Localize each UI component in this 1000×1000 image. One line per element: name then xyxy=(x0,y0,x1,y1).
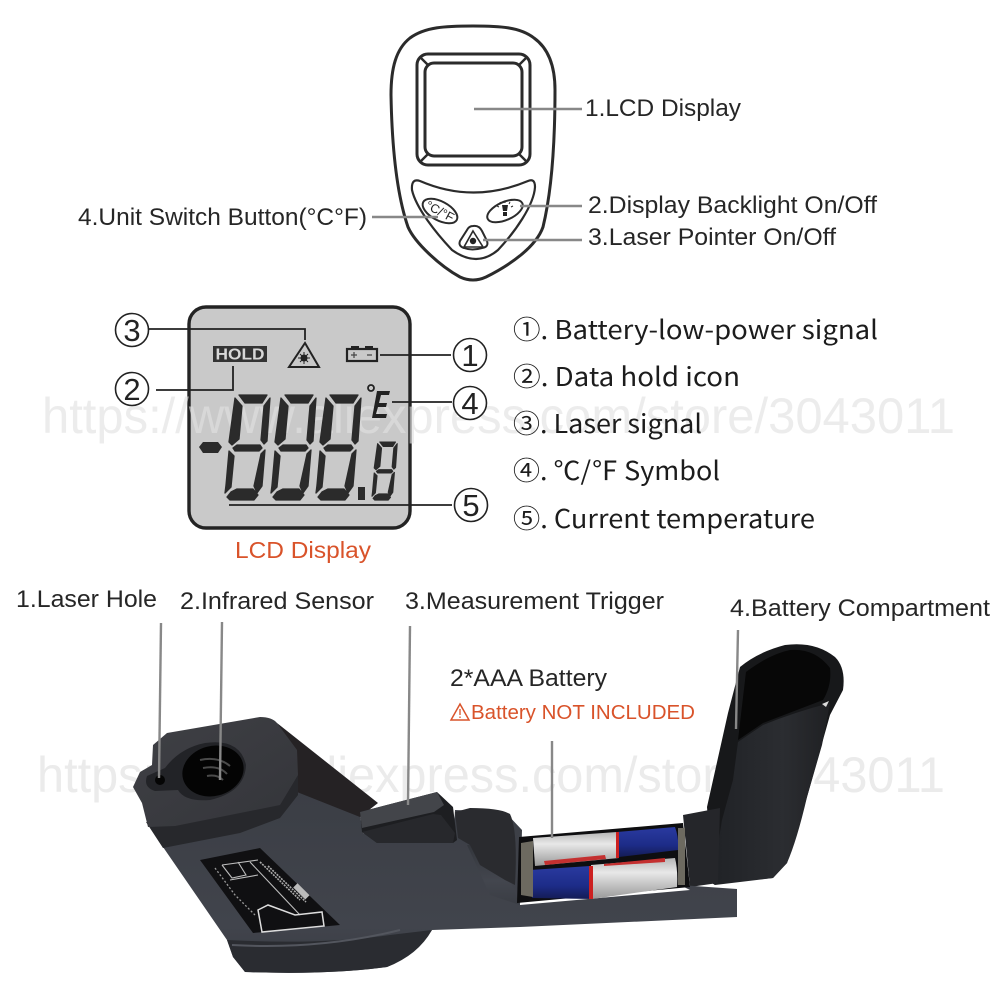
LCD indicators and digits xyxy=(199,343,397,500)
seven segment digit xyxy=(225,395,270,500)
legend list xyxy=(513,310,878,536)
device body outline xyxy=(391,26,555,280)
collar xyxy=(455,808,516,885)
seven segment digit xyxy=(316,395,361,500)
leader lines for device diagram xyxy=(372,109,582,240)
grip highlight xyxy=(232,930,400,946)
HOLD icon: HOLD xyxy=(216,346,264,364)
LCD caption: LCD Display xyxy=(235,537,372,563)
neck xyxy=(467,845,520,905)
watermark lower: https://www.aliexpress.com/store/3043011 xyxy=(37,747,945,803)
warning: battery not included: Battery NOT INCLUDED xyxy=(471,702,695,724)
unit switch button: °C/°F xyxy=(423,198,457,225)
callout 4 xyxy=(454,386,486,421)
legend item 5: ⑤. Current temperature xyxy=(513,499,815,536)
label: AAA battery: 2*AAA Battery xyxy=(450,665,607,692)
label: LCD display: 1.LCD Display xyxy=(585,95,741,122)
seven segment digit xyxy=(271,395,316,500)
head front face xyxy=(133,717,298,827)
battery cover xyxy=(683,644,844,887)
label: laser pointer: 3.Laser Pointer On/Off xyxy=(588,224,836,251)
sensor hole xyxy=(146,739,249,803)
battery bottom xyxy=(530,858,677,899)
unit switch button xyxy=(419,194,461,228)
head rim xyxy=(146,772,298,848)
battery bay xyxy=(517,823,690,903)
laser button xyxy=(460,226,487,250)
label: laser hole: 1.Laser Hole xyxy=(16,586,157,613)
LCD callout leaders xyxy=(148,329,452,505)
callout 3 xyxy=(116,313,148,348)
legend item 3: ③. Laser signal xyxy=(513,404,702,441)
callout 2 xyxy=(116,372,148,407)
bottom photo leaders xyxy=(159,622,738,838)
callout 3: 3 xyxy=(123,313,141,348)
callout 1: 1 xyxy=(461,338,479,373)
label: infrared sensor: 2.Infrared Sensor xyxy=(180,588,374,615)
callout 5: 5 xyxy=(462,488,480,523)
label: backlight: 2.Display Backlight On/Off xyxy=(588,192,877,219)
decimal point xyxy=(358,487,365,500)
legend item 1: ①. Battery-low-power signal xyxy=(513,310,878,347)
legend item 4: ④. ℃/℉ Symbol xyxy=(513,451,720,488)
battery top xyxy=(533,827,678,866)
thermometer photo xyxy=(133,644,844,973)
degree F symbol xyxy=(368,385,390,418)
laser icon xyxy=(289,343,319,367)
callout 5 xyxy=(454,488,488,523)
button panel xyxy=(412,180,535,259)
device front outline diagram xyxy=(391,26,555,280)
battery icon xyxy=(347,346,377,361)
sticker xyxy=(200,848,340,933)
battery springs xyxy=(521,828,685,897)
small seven segment digit xyxy=(372,442,397,500)
grip bottom edge xyxy=(227,930,432,973)
label: battery compartment: 4.Battery Compartment xyxy=(730,595,990,622)
grip body xyxy=(150,790,737,973)
trigger xyxy=(360,792,457,843)
callout 1 xyxy=(454,338,486,373)
minus segment xyxy=(199,442,222,453)
LCD window frame xyxy=(417,54,530,165)
panel: LCD screen xyxy=(189,307,410,528)
label: unit switch: 4.Unit Switch Button(°C°F) xyxy=(78,204,367,231)
backlight button xyxy=(484,195,526,227)
label: measurement trigger: 3.Measurement Trigger xyxy=(405,588,664,615)
watermark upper: https://www.aliexpress.com/store/3043011 xyxy=(42,388,955,444)
legend item 2: ②. Data hold icon xyxy=(513,357,740,394)
callout 4: 4 xyxy=(461,386,479,421)
callout 2: 2 xyxy=(123,372,141,407)
upper dark side xyxy=(277,723,378,817)
